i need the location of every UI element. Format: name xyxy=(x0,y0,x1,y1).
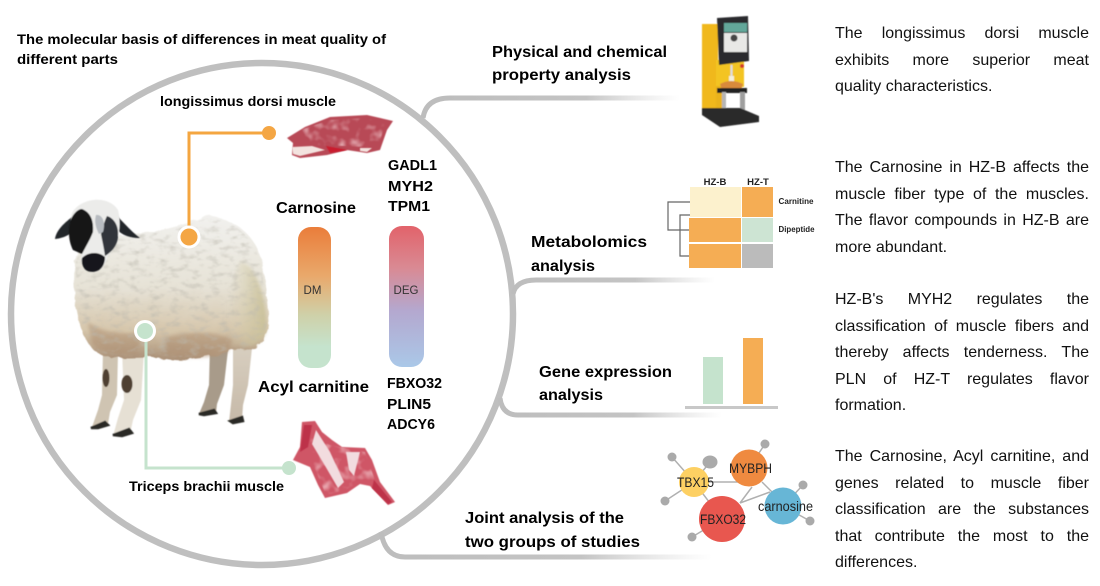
text: joint analysis conclusion: differences. xyxy=(835,554,917,571)
heading: gene expression analysis: analysis xyxy=(539,387,603,404)
connector: metabolomics analysis xyxy=(513,280,715,294)
callout line: triceps brachii xyxy=(136,322,296,475)
heading: joint analysis xyxy=(465,510,640,551)
text: metabolomics conclusion: The Carnosine in HZ-B affects the xyxy=(835,159,1089,176)
connector: physical and chemical analysis xyxy=(423,98,680,118)
heading: gene expression analysis xyxy=(539,364,672,404)
text: physical and chemical conclusion xyxy=(835,25,1089,95)
sheep rump shading xyxy=(228,262,266,347)
chart: gene network xyxy=(660,440,814,542)
gene list: downregulated: PLIN5 xyxy=(387,397,431,413)
text: joint analysis conclusion xyxy=(835,448,1089,571)
heading: metabolomics analysis: Metabolomics xyxy=(531,234,647,251)
title xyxy=(17,31,386,67)
chart: gene network: FBXO32 xyxy=(700,511,746,527)
callout line: longissimus dorsi xyxy=(179,126,276,247)
wool texture xyxy=(76,218,267,357)
sheep legs xyxy=(91,345,252,436)
heading: Acyl carnitine: Acyl carnitine xyxy=(258,379,369,396)
chart: gene network: MYBPH xyxy=(729,460,772,476)
gene list: downregulated xyxy=(387,376,442,433)
text: joint analysis conclusion: that contribute the most to the xyxy=(835,528,1089,544)
text: physical and chemical conclusion: quality characteristics. xyxy=(835,78,992,95)
DM gradient bar: DM xyxy=(304,285,321,297)
chart: metabolite heatmap xyxy=(668,177,815,268)
DEG gradient bar: DEG xyxy=(394,285,419,297)
large circle outline xyxy=(11,63,513,565)
text: gene expression conclusion: formation. xyxy=(835,397,906,414)
heading: physical and chemical property analysis: Physical and chemical xyxy=(492,44,667,61)
text: metabolomics conclusion xyxy=(835,159,1089,256)
marker: loin end dot xyxy=(262,126,276,140)
heading: joint analysis: Joint analysis of the xyxy=(465,510,624,527)
label: triceps brachii muscle: Triceps brachii muscle xyxy=(129,478,284,494)
marker: triceps end dot xyxy=(282,461,296,475)
chart: metabolite heatmap: Carnitine xyxy=(778,196,814,206)
chart: gene network: TBX15 xyxy=(677,474,714,490)
heading: metabolomics analysis: analysis xyxy=(531,258,595,275)
text: metabolomics conclusion: The flavor compounds in HZ-B are xyxy=(835,212,1089,229)
gene list: downregulated: ADCY6 xyxy=(387,417,435,433)
text: joint analysis conclusion: The Carnosine, Acyl carnitine, and xyxy=(835,448,1089,465)
text: gene expression conclusion: thereby affects tenderness. The xyxy=(835,344,1089,361)
icon: sheep xyxy=(55,200,269,436)
DEG gradient bar xyxy=(389,226,424,367)
sheep body wool xyxy=(74,216,269,359)
text: physical and chemical conclusion: The longissimus dorsi muscle xyxy=(835,25,1089,42)
gene list: upregulated: MYH2 xyxy=(388,179,433,195)
gene list: downregulated: FBXO32 xyxy=(387,376,442,392)
text: joint analysis conclusion: genes related to muscle fiber xyxy=(835,474,1089,492)
text: metabolomics conclusion: more abundant. xyxy=(835,238,947,256)
chart: metabolite heatmap: HZ-T xyxy=(747,177,769,188)
heading: joint analysis: two groups of studies xyxy=(465,534,640,551)
icon: loin meat xyxy=(287,115,393,158)
connector: joint analysis xyxy=(381,532,712,557)
marker: loin point on sheep xyxy=(179,227,199,247)
text: physical and chemical conclusion: exhibits more superior meat xyxy=(835,52,1089,68)
gene list: upregulated xyxy=(388,158,437,215)
chart: metabolite heatmap: HZ-B xyxy=(704,177,726,188)
heading: physical and chemical property analysis: property analysis xyxy=(492,67,631,84)
text: joint analysis conclusion: classification are the substances xyxy=(835,501,1089,518)
heading: metabolomics analysis xyxy=(531,234,647,275)
title: different parts xyxy=(17,51,118,67)
gene list: upregulated: GADL1 xyxy=(388,158,437,174)
title: The molecular basis of differences in meat quality of xyxy=(17,31,386,47)
icon: shoulder meat xyxy=(293,421,395,505)
icon: texture analyser machine xyxy=(702,16,759,127)
marker: shoulder point on sheep xyxy=(136,322,154,340)
text: gene expression conclusion: HZ-B's MYH2 regulates the xyxy=(835,291,1089,308)
chart: gene network: carnosine xyxy=(758,498,813,514)
dendrogram xyxy=(668,202,690,256)
text: gene expression conclusion: PLN of HZ-T regulates flavor xyxy=(835,370,1089,388)
text: metabolomics conclusion: muscle fiber type of the muscles. xyxy=(835,186,1089,202)
sheep head xyxy=(69,200,120,272)
sheep belly shading xyxy=(88,322,232,358)
heading: physical and chemical property analysis xyxy=(492,44,667,84)
gene list: upregulated: TPM1 xyxy=(388,199,430,215)
connector: gene expression analysis xyxy=(500,398,722,415)
label: longissimus dorsi muscle: longissimus dorsi muscle xyxy=(160,93,336,109)
heading: gene expression analysis: Gene expression xyxy=(539,364,672,381)
chart: metabolite heatmap: Dipeptide xyxy=(778,224,815,234)
heading: Carnosine: Carnosine xyxy=(276,200,356,217)
DM gradient bar xyxy=(298,227,331,368)
sheep ears xyxy=(55,216,140,239)
chart: gene expression bars xyxy=(685,338,778,409)
text: gene expression conclusion xyxy=(835,291,1089,414)
text: gene expression conclusion: classification of muscle fibers and xyxy=(835,318,1089,334)
